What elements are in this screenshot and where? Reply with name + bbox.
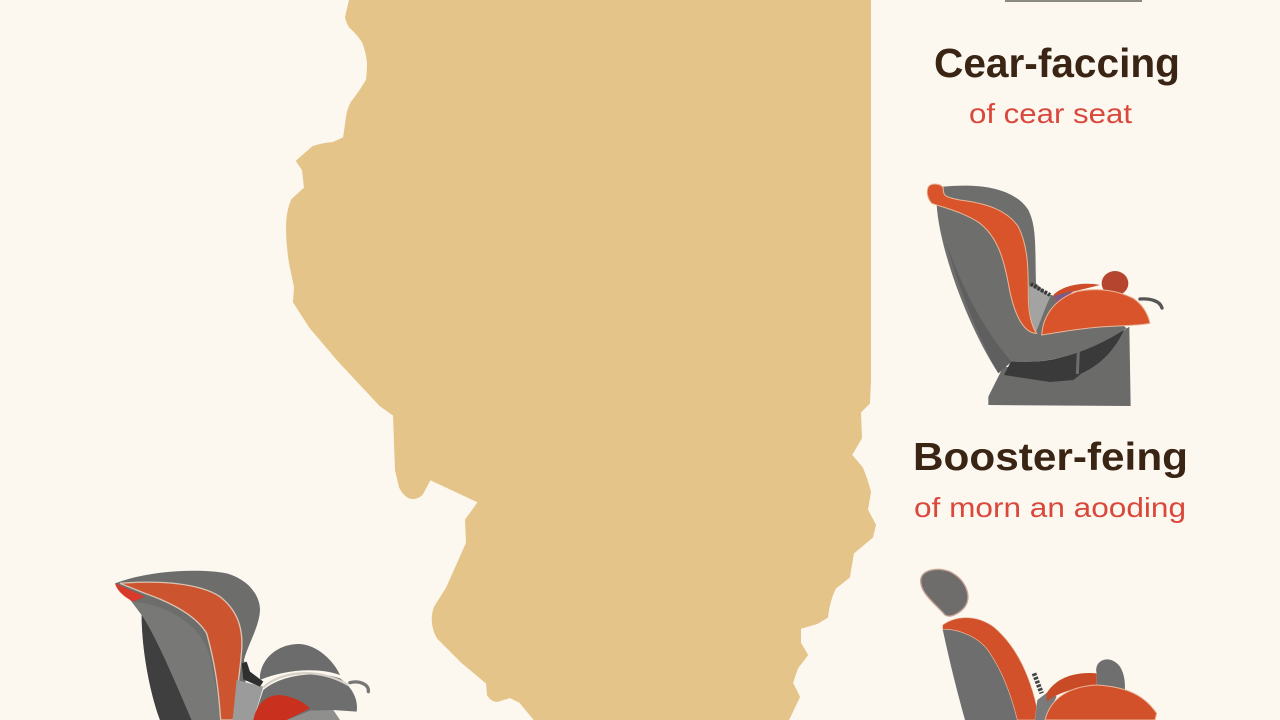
state map silhouette [287, 0, 875, 720]
icon: booster car seat [921, 569, 1157, 720]
heading: booster-facing: Booster-feing [913, 436, 1188, 479]
subheading: booster-facing: of morn an aooding [914, 492, 1186, 523]
heading: rear-facing: Cear-faccing [934, 40, 1180, 86]
subheading: rear-facing: of cear seat [969, 98, 1132, 129]
icon: forward-facing car seat [115, 571, 368, 720]
icon: rear-facing car seat [927, 184, 1162, 406]
partial seat base at top edge [1005, 0, 1142, 2]
